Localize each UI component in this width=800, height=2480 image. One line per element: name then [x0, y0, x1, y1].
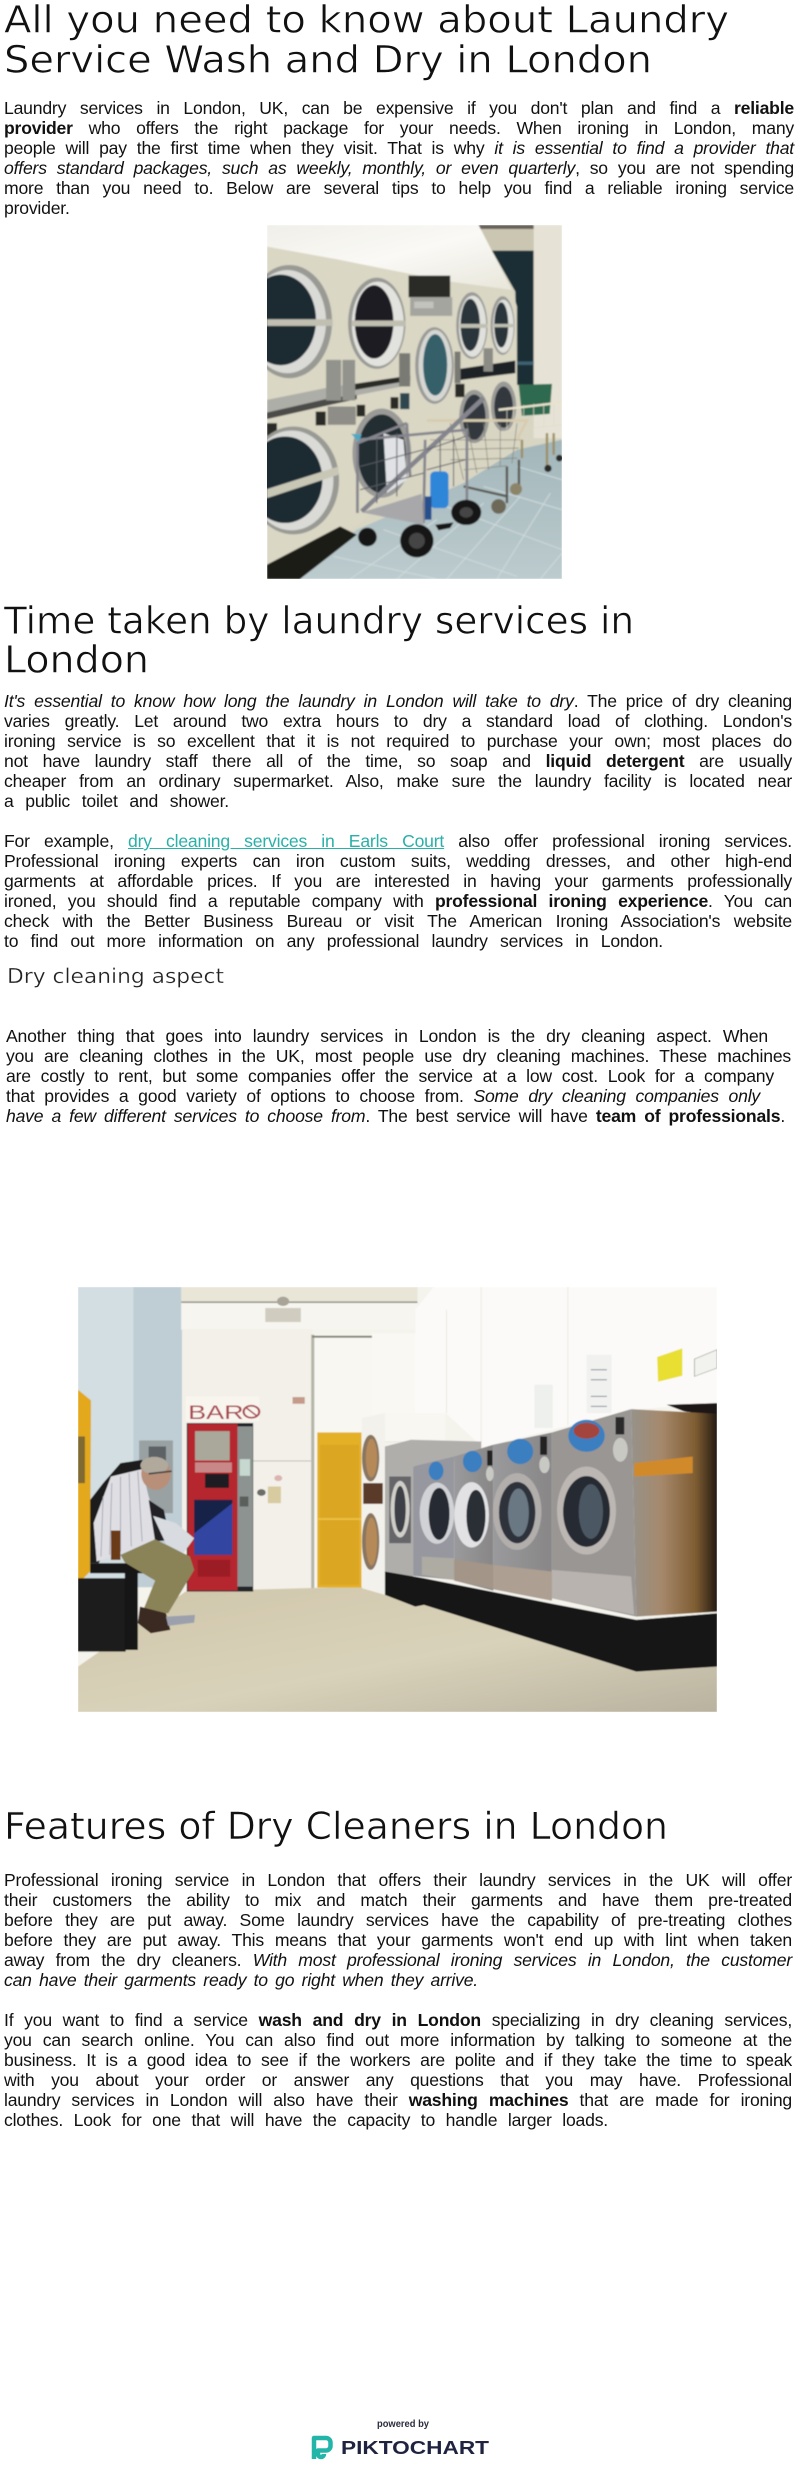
text block: ironing experts: check with the Better Business Bureau or visit The American Ironing Association's website [4, 911, 792, 931]
text block: how long laundry takes: cheaper from an ordinary supermarket. Also, make sure the laundry facility is located near [4, 771, 792, 791]
heading: time taken: London [4, 638, 149, 682]
vending machine [187, 1423, 253, 1592]
text block: ironing experts: For example, dry cleaning services in Earls Court also offer professional ironing services. [4, 831, 792, 851]
text block: finding a service: you can search online. You can also find out more information by talking to someone at the [4, 2030, 792, 2050]
footer: powered by Piktochart logo: PIKTOCHART [341, 2438, 489, 2458]
icon: Piktochart mark [314, 2438, 330, 2459]
text block: dry cleaning: Another thing that goes into laundry services in London is the dry cleaning aspect. When [6, 1026, 768, 1046]
text block: introduction: provider who offers the right package for your needs. When ironing in London, many [4, 118, 794, 138]
heading: time taken: Time taken by laundry services in [3, 600, 634, 642]
text block: how long laundry takes: It's essential to know how long the laundry in London will take to dry. The price of dry cleaning [4, 691, 792, 711]
stacked dryers [362, 1413, 385, 1595]
text block: finding a service: business. It is a good idea to see if the workers are polite and if they take the time to speak [4, 2050, 792, 2070]
photo: laundromat interior with man reading: BAR [188, 1402, 244, 1423]
text block: how long laundry takes: not have laundry staff there all of the time, so soap and liquid detergent are usually [4, 751, 792, 771]
text block: dry cleaning: you are cleaning clothes in the UK, most people use dry cleaning machines. These machines [6, 1046, 791, 1066]
photo: laundromat interior with man reading [78, 1287, 717, 1712]
text block: ironing experts: Professional ironing experts can iron custom suits, wedding dresses, and other high-end [4, 851, 792, 871]
BAR sign [186, 1396, 259, 1421]
text block: how long laundry takes: varies greatly. Let around two extra hours to dry a standard load of clothing. London's [4, 711, 792, 731]
footer: powered by Piktochart logo [312, 2418, 489, 2460]
control panels [429, 1461, 443, 1480]
man on bench [78, 1578, 126, 1652]
panels and controls [408, 276, 450, 297]
text block: dry cleaning: are costly to rent, but some companies offer the service at a low cost. Look for a company [6, 1066, 774, 1086]
text block: how long laundry takes [4, 691, 792, 811]
text block: how long laundry takes: ironing service is so excellent that it is not required to purchase your own; most places do [4, 731, 792, 751]
chair and baskets [519, 384, 552, 416]
yellow door [317, 1432, 362, 1588]
text block: finding a service: clothes. Look for one that will have the capacity to handle larger loads. [4, 2110, 608, 2130]
footer: powered by Piktochart logo: powered by [377, 2418, 429, 2430]
text block: finding a service: with you about your order or answer any questions that you may have. Professional [4, 2070, 792, 2090]
text block: ironing experts [4, 831, 792, 951]
text block: professional ironing service: away from the dry cleaners. With most professional ironing services in London, the customer [4, 1950, 792, 1970]
text block: ironing experts: ironed, you should find a reputable company with professional ironing experience. You can [4, 891, 792, 911]
drums upper row [247, 265, 332, 378]
text block: ironing experts: garments at affordable prices. If you are interested in having your garments professionally [4, 871, 792, 891]
washers [413, 1456, 454, 1580]
text block: professional ironing service: Professional ironing service in London that offers their laundry services in the UK will offer [4, 1870, 792, 1890]
subheading: dry cleaning aspect: Dry cleaning aspect [7, 964, 224, 988]
text block: introduction: more than you need to. Below are several tips to help you find a reliable ironing service [4, 178, 794, 198]
text block: professional ironing service: can have their garments ready to go right when they arrive. [4, 1970, 478, 1990]
title: Service Wash and Dry in London [4, 38, 652, 82]
doors [420, 1482, 454, 1544]
text block: professional ironing service: before they are put away. This means that your garments won't end up with lint when taken [4, 1930, 792, 1950]
text block: how long laundry takes: a public toilet and shower. [4, 791, 229, 811]
text block: professional ironing service [4, 1870, 793, 1990]
text block: finding a service [4, 2010, 792, 2130]
base [385, 1572, 717, 1672]
heading: features of dry cleaners: Features of Dry Cleaners in London [4, 1805, 668, 1848]
text block: introduction: offers standard packages, such as weekly, monthly, or even quarterly, so you are not spending [4, 158, 794, 178]
text block: finding a service: laundry services in London will also have their washing machines that are made for ironing [4, 2090, 792, 2110]
text block: dry cleaning: that provides a good variety of options to choose from. Some dry cleaning companies only [6, 1086, 760, 1106]
text block: introduction: provider. [4, 198, 70, 218]
cart [357, 398, 484, 523]
text block: professional ironing service: before they are put away. Some laundry services have the capability of pre-treating clothes [4, 1910, 792, 1930]
text block: introduction: people will pay the first time when they visit. That is why it is essential to find a provider that [4, 138, 794, 158]
text block: professional ironing service: their customers the ability to mix and match their garments and have them pre-treated [4, 1890, 792, 1910]
text block: finding a service: If you want to find a service wash and dry in London specializing in dry cleaning services, [4, 2010, 792, 2030]
text block: dry cleaning [6, 1026, 791, 1126]
text block: introduction: Laundry services in London, UK, can be expensive if you don't plan and find a reliable [4, 98, 794, 118]
middle machine [385, 1440, 481, 1577]
wall notices [657, 1348, 682, 1382]
photo: row of stacked laundromat dryers with carts [267, 225, 562, 579]
door items [268, 1486, 281, 1503]
text block: dry cleaning: have a few different services to choose from. The best service will have team of professionals. [6, 1106, 785, 1126]
text block: introduction [4, 98, 795, 218]
title [4, 0, 729, 82]
drums lower row [248, 426, 339, 534]
heading: time taken [3, 600, 634, 682]
text block: ironing experts: to find out more information on any professional laundry services in London. [4, 931, 663, 951]
